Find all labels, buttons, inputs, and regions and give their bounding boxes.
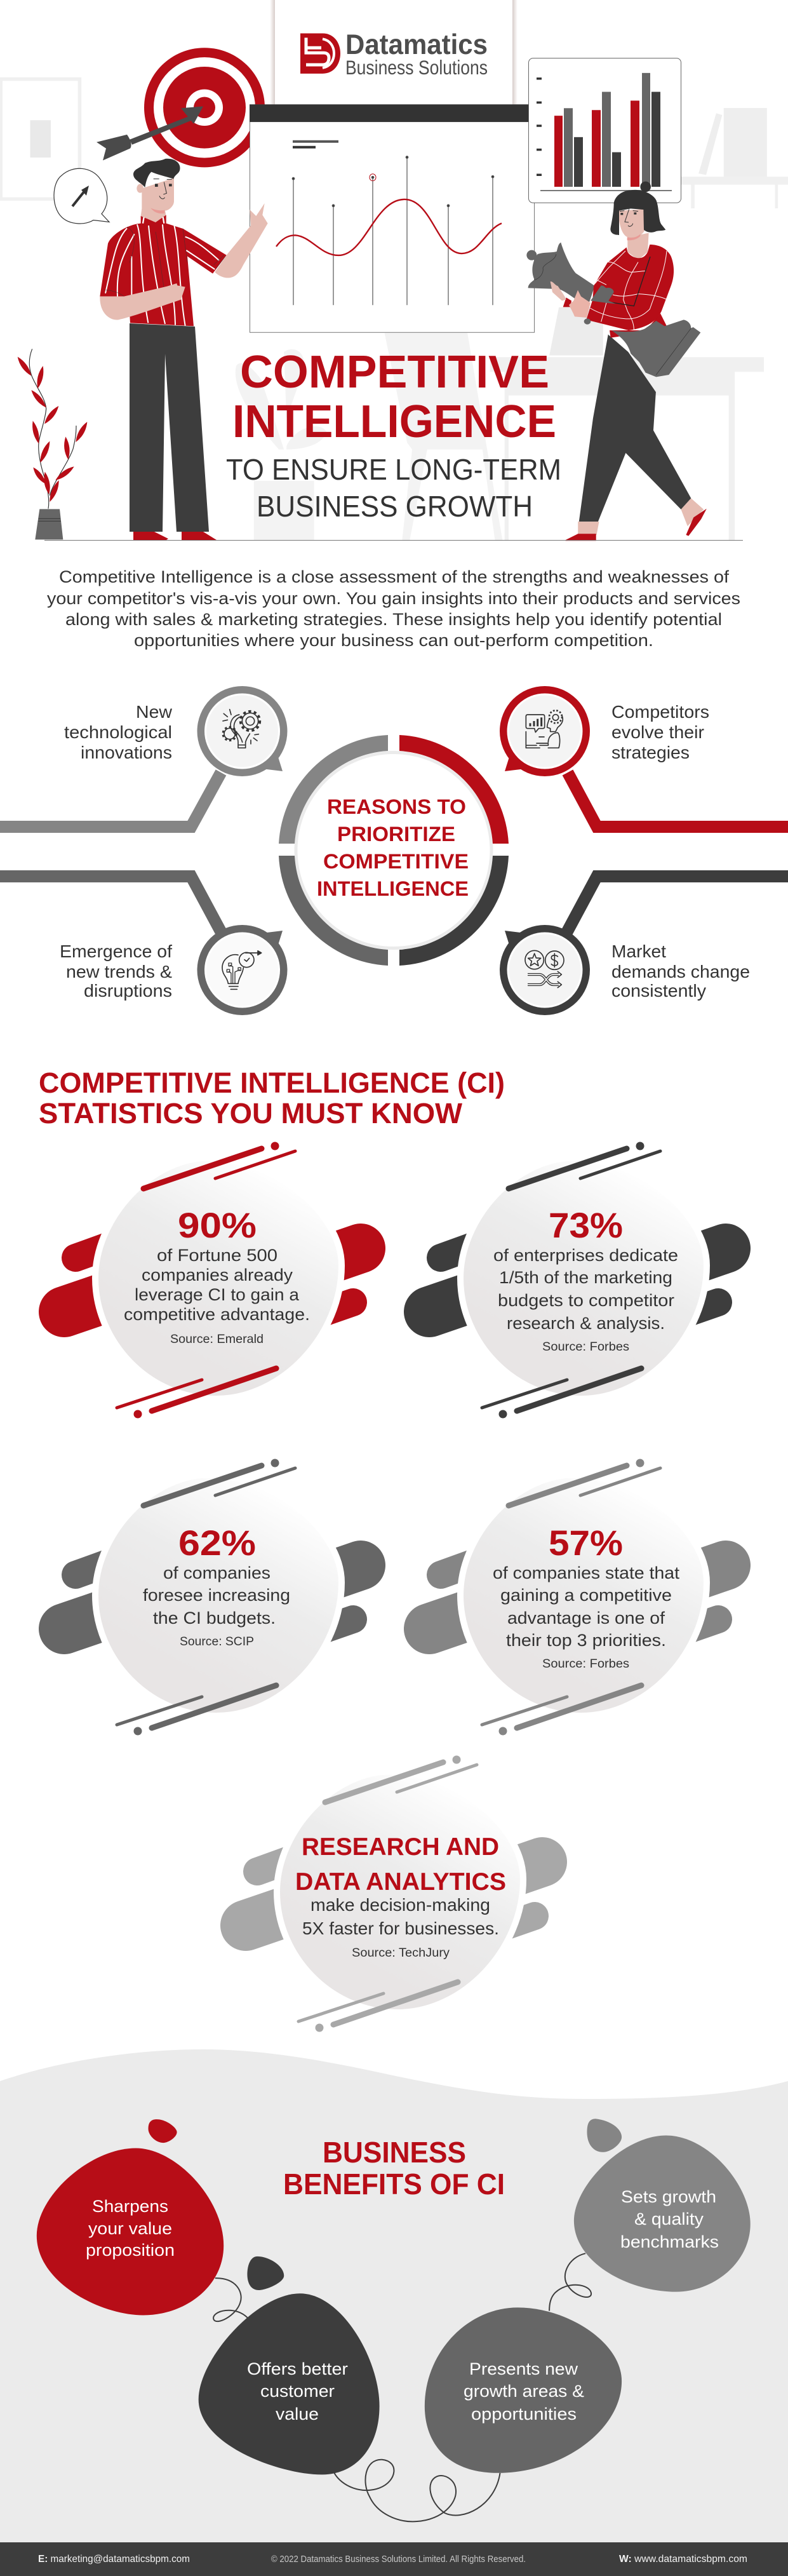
chart bars: [554, 73, 660, 187]
label: new trends &: [66, 962, 172, 981]
central heading: COMPETITIVE: [323, 850, 469, 873]
stat source: Source: Emerald: [170, 1332, 264, 1346]
panel: stat 73%: [429, 1142, 726, 1418]
piece upper half: [526, 243, 595, 302]
desk: [490, 357, 764, 541]
icon: bulb and gears: [223, 710, 260, 748]
eyes: [155, 184, 172, 187]
label: demands change: [611, 962, 750, 981]
label: innovations: [81, 743, 172, 762]
logo wordmark: Business Solutions: [345, 56, 488, 79]
man shoes: [133, 532, 217, 540]
stat number: 57%: [549, 1523, 623, 1563]
character: man: [100, 159, 268, 540]
arrow into target: [97, 106, 203, 160]
label: Market: [611, 941, 666, 961]
intro paragraph: Competitive Intelligence is a close assessment of the strengths and weaknesses of: [59, 567, 730, 586]
benefit: benchmarks: benchmarks: [620, 2232, 719, 2251]
benefit: value proposition: Sharpens: [92, 2197, 168, 2216]
frame inner block: [30, 120, 51, 158]
neck shadow: [150, 208, 164, 213]
stat graphic: [64, 1459, 361, 1736]
bar chart card: [528, 58, 681, 203]
stat heading: RESEARCH AND: [302, 1833, 499, 1861]
hair: [133, 159, 180, 187]
header scene: [54, 0, 681, 332]
benefit: growth areas: [464, 2359, 584, 2424]
piece lower half: [611, 320, 700, 377]
stat description: gaining a competitive: [500, 1586, 672, 1605]
man trousers: [130, 323, 209, 532]
woman upper body: [526, 182, 700, 377]
faint potted plant: [236, 349, 326, 540]
label: [611, 702, 709, 762]
presentation board: [250, 104, 535, 332]
benefits heading: BENEFITS OF CI: [283, 2168, 505, 2201]
central ring: [279, 735, 509, 966]
board title marks: [293, 140, 338, 143]
pot band: [38, 518, 61, 521]
character: woman: [526, 182, 707, 541]
face details: [154, 179, 172, 199]
front hand: [569, 290, 591, 318]
benefit: growth areas: opportunities: [471, 2404, 577, 2424]
stat description: of Fortune 500: [157, 1246, 277, 1265]
light gray small blob: [587, 2119, 622, 2152]
neck: [627, 233, 649, 260]
icon: logo mark: [300, 33, 340, 74]
piece base: [584, 318, 591, 325]
mid gray blob: [425, 2307, 622, 2473]
red blob: [37, 2148, 224, 2315]
benefit: value proposition: your value: [88, 2219, 172, 2238]
panel: stat 57%: [429, 1459, 726, 1736]
stat description: of enterprises dedicate: [493, 1246, 678, 1265]
benefit: value proposition: proposition: [86, 2241, 175, 2260]
stat description: [493, 1563, 680, 1650]
hip: [610, 313, 667, 338]
label: [64, 702, 173, 762]
ground line: [44, 540, 743, 541]
label: [611, 941, 750, 1001]
benefit: customer value: [247, 2359, 348, 2424]
logo wordmark: Datamatics: [345, 29, 488, 60]
dark blob: [199, 2293, 380, 2474]
stat graphic: [246, 1756, 542, 2032]
stat heading: [295, 1833, 506, 1896]
label: [60, 941, 172, 1001]
benefit: benchmarks: [620, 2187, 719, 2251]
sweater: [586, 245, 674, 330]
stat graphic: [64, 1142, 361, 1418]
stat source: Source: Forbes: [542, 1340, 629, 1354]
footer website: W: www.datamaticsbpm.com: [619, 2554, 747, 2565]
axis ticks: [537, 79, 542, 175]
panel: research and data analytics: [246, 1756, 542, 2032]
title: TO ENSURE LONG-TERM: [226, 453, 561, 486]
chart lines: [292, 156, 494, 305]
intro paragraph: along with sales & marketing strategies. These insights help you identify potential: [65, 610, 722, 629]
panel: business benefits background: [0, 2049, 788, 2542]
statistics heading: [39, 1067, 505, 1130]
icon: speech bubble with arrow: [54, 168, 109, 224]
stat heading: DATA ANALYTICS: [295, 1868, 506, 1896]
stat description: 1/5th of the marketing: [499, 1268, 672, 1287]
callout: technological innovations: [64, 686, 287, 776]
label: consistently: [611, 981, 706, 1001]
stat number: 62%: [178, 1523, 256, 1563]
benefit: customer value: value: [276, 2404, 319, 2424]
statistics heading: STATISTICS YOU MUST KNOW: [39, 1097, 463, 1130]
benefit: value proposition: [86, 2197, 175, 2260]
stat source: Source: TechJury: [352, 1946, 450, 1960]
stat description: their top 3 priorities.: [506, 1631, 666, 1650]
benefits heading: BUSINESS: [323, 2136, 466, 2169]
stat source: Source: Forbes: [542, 1657, 629, 1671]
stat description: the CI budgets.: [153, 1608, 276, 1628]
stat description: [493, 1246, 678, 1333]
intro paragraph: [47, 567, 740, 650]
benefit: growth areas: Presents new: [469, 2359, 578, 2378]
panel: reasons diagram: [0, 686, 788, 1015]
label: evolve their: [611, 722, 704, 742]
man upper body: [100, 159, 268, 326]
right arm: [215, 203, 268, 278]
stat description: [143, 1563, 290, 1628]
stat source: Source: SCIP: [180, 1635, 254, 1649]
red curve: [276, 199, 502, 255]
binders: [698, 108, 767, 177]
woman trousers: [579, 335, 691, 522]
board subtitle mark: [293, 146, 316, 149]
stat description: leverage CI to gain a: [135, 1285, 300, 1304]
piece seam: [535, 254, 556, 280]
intro paragraph: opportunities where your business can out-perform competition.: [134, 631, 653, 650]
red small blob: [148, 2119, 177, 2143]
label: disruptions: [84, 981, 172, 1001]
neck and face: [141, 178, 174, 224]
central heading: [317, 795, 469, 900]
plant stem: [29, 349, 76, 509]
central heading: INTELLIGENCE: [317, 877, 469, 900]
wall frame: [0, 78, 81, 201]
central heading: REASONS TO: [327, 795, 466, 818]
face details: [620, 209, 638, 226]
central heading: PRIORITIZE: [337, 823, 455, 846]
callout: competitors evolve: [500, 686, 709, 776]
collar marks: [143, 217, 164, 224]
neck shadow: [627, 234, 640, 240]
faint chair: [384, 333, 503, 541]
connector top right: [568, 772, 788, 827]
stat number: 90%: [178, 1205, 257, 1245]
panel shadow right: [512, 0, 518, 104]
footer copyright: © 2022 Datamatics Business Solutions Limited. All Rights Reserved.: [271, 2554, 526, 2565]
intro paragraph: your competitor's vis-a-vis your own. You gain insights into their products and services: [47, 589, 740, 608]
sweater check lines: [590, 251, 667, 330]
stat description: advantage is one of: [507, 1608, 665, 1628]
title: COMPETITIVE: [240, 347, 549, 398]
benefit: benchmarks: & quality: [634, 2209, 704, 2229]
logo panel: [270, 0, 518, 104]
stat description: of companies state that: [493, 1563, 680, 1582]
potted plant: [18, 349, 87, 539]
stat description: of companies: [163, 1563, 270, 1582]
panel: stat 90%: [64, 1142, 361, 1418]
stat description: research & analysis.: [507, 1314, 665, 1333]
sweater fold: [608, 257, 650, 306]
stat description: [302, 1895, 499, 1938]
icon: analyst with chart: [526, 710, 563, 748]
label: strategies: [611, 743, 690, 762]
panel shadow: [270, 0, 275, 104]
plant leaves: [18, 357, 87, 502]
icon: bulb with clock and arrow: [222, 951, 262, 989]
stat graphic: [429, 1459, 726, 1736]
benefit: growth areas: growth areas &: [464, 2382, 584, 2401]
stat description: [124, 1246, 310, 1324]
shirt stripes: [105, 224, 219, 326]
logo wordmark: [345, 29, 488, 79]
stat description: competitive advantage.: [124, 1305, 310, 1324]
title: BUSINESS GROWTH: [257, 490, 533, 523]
stat description: 5X faster for businesses.: [302, 1919, 499, 1938]
chart baseline: [540, 190, 672, 191]
connector bottom left: [0, 877, 221, 932]
panel body: [275, 0, 512, 104]
statistics heading: COMPETITIVE INTELLIGENCE (CI): [39, 1067, 505, 1099]
label: Emergence of: [60, 941, 172, 961]
callout: trends and disruptions: [60, 925, 287, 1015]
benefit: customer value: customer: [260, 2382, 335, 2401]
benefit: customer value: Offers better: [247, 2359, 348, 2378]
right shelf: [681, 177, 788, 208]
icon: star dollar and arrows: [525, 950, 564, 988]
woman legs and shoes: [565, 498, 707, 541]
shirt: [100, 215, 227, 326]
hair: [610, 190, 665, 235]
label: Competitors: [611, 702, 709, 722]
panel: stat 62%: [64, 1459, 361, 1736]
benefit: benchmarks: Sets growth: [621, 2187, 716, 2206]
callout: market demands: [500, 925, 750, 1015]
title: INTELLIGENCE: [232, 396, 556, 447]
ear: [137, 184, 144, 193]
woman eyes: [620, 212, 636, 215]
stat description: budgets to competitor: [498, 1291, 674, 1310]
stat description: companies already: [142, 1265, 293, 1285]
gray fingers: [591, 285, 616, 304]
label: New: [136, 702, 173, 722]
laptop on desk: [549, 307, 603, 355]
back hand cuff: [563, 297, 571, 307]
left arm: [100, 283, 185, 320]
icon: target: [144, 48, 265, 167]
stat number: 73%: [549, 1205, 623, 1245]
rear hand: [551, 281, 566, 300]
light gray blob: [574, 2136, 751, 2292]
hair bun: [640, 182, 651, 192]
marker ring: [370, 174, 376, 181]
footer email: E: marketing@datamaticsbpm.com: [38, 2554, 190, 2565]
title: [226, 347, 561, 523]
footer: [0, 2542, 788, 2576]
stat graphic: [429, 1142, 726, 1418]
dark small blob: [247, 2256, 284, 2290]
connector squiggles: [213, 2253, 591, 2521]
benefits heading: [283, 2136, 505, 2201]
shirt seams: [105, 227, 225, 297]
stat description: make decision-making: [311, 1895, 490, 1915]
piece edge: [656, 328, 691, 375]
connector top left: [0, 772, 221, 827]
benefit blobs and connectors: [37, 2119, 751, 2521]
connector bottom right: [567, 877, 788, 932]
header background furniture: [0, 78, 788, 541]
face: [618, 209, 644, 238]
label: technological: [64, 722, 172, 742]
stat description: foresee increasing: [143, 1586, 290, 1605]
plant pot: [35, 509, 63, 539]
